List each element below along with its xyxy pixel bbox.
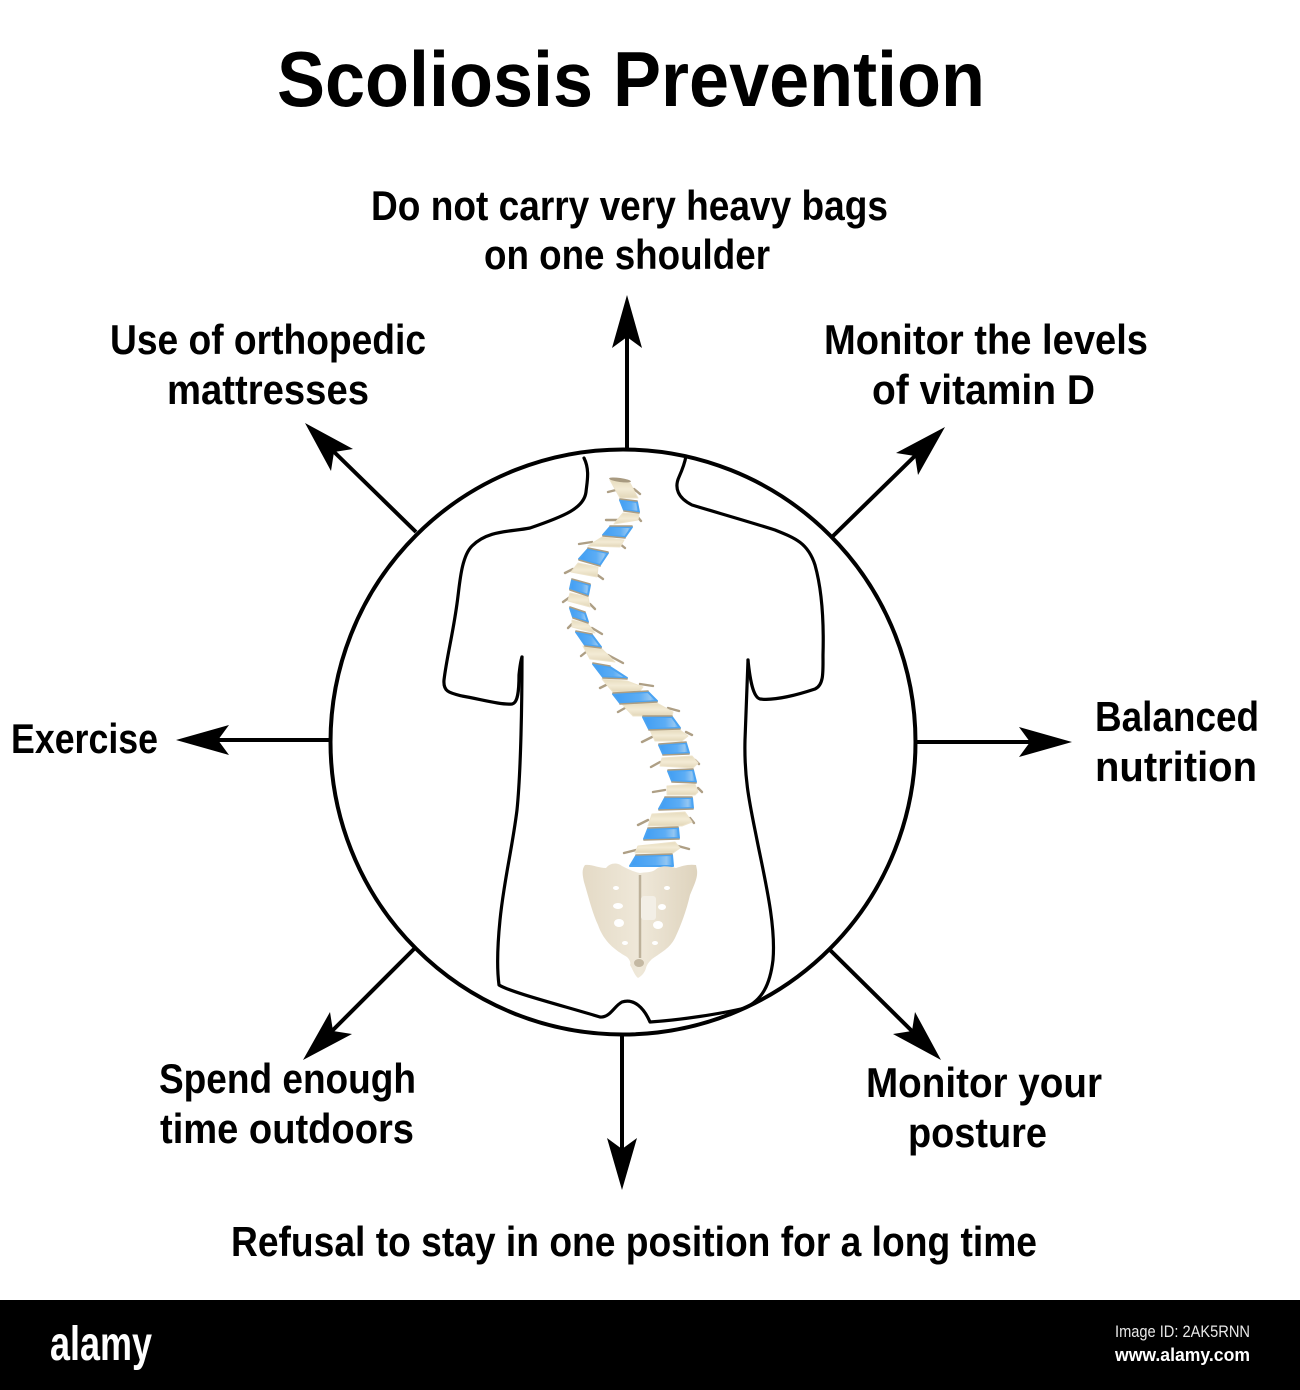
label: heavy bags — [371, 182, 888, 278]
arrow: right — [916, 727, 1072, 757]
arrow: down — [607, 1035, 637, 1190]
vertebrae — [568, 480, 698, 853]
label: vitamin D: Monitor the levels — [824, 316, 1148, 363]
label: time outdoors — [159, 1055, 416, 1152]
label: balanced nutrition — [1095, 693, 1259, 790]
vertebra end plates — [570, 499, 696, 855]
arrow: up left — [305, 423, 416, 532]
sacrum — [583, 864, 697, 978]
label: time outdoors: time outdoors — [160, 1105, 414, 1152]
central circle — [330, 450, 916, 1034]
label: balanced nutrition: nutrition — [1095, 743, 1257, 790]
label: time outdoors: Spend enough — [159, 1055, 416, 1102]
arrow: up — [612, 295, 642, 450]
label: long positions: Refusal to stay in one position for a long time — [231, 1218, 1037, 1265]
footer url: www.alamy.com — [1114, 1345, 1250, 1365]
torso outline — [444, 456, 823, 1022]
spinal processes — [563, 489, 702, 853]
label: posture: Monitor your — [866, 1059, 1102, 1106]
arrow: left — [176, 725, 330, 755]
footer image id: Image ID: 2AK5RNN — [1115, 1322, 1250, 1341]
title: Scoliosis Prevention — [277, 35, 985, 123]
arrow: down right — [830, 950, 941, 1060]
label: heavy bags: on one shoulder — [484, 231, 770, 278]
spine — [563, 476, 702, 866]
arrow: down left — [303, 949, 414, 1060]
label: orthopedic mattresses: mattresses — [167, 366, 369, 413]
label: exercise: Exercise — [11, 715, 158, 762]
label: vitamin D: of vitamin D — [872, 366, 1095, 413]
label: heavy bags: Do not carry very heavy bags — [371, 182, 888, 229]
label: vitamin D — [824, 316, 1148, 413]
label: balanced nutrition: Balanced — [1095, 693, 1259, 740]
arrow: up right — [832, 427, 945, 537]
label: orthopedic mattresses: Use of orthopedic — [110, 316, 426, 363]
intervertebral discs — [570, 500, 696, 866]
label: posture: posture — [908, 1109, 1047, 1156]
top vertebra cap — [609, 476, 631, 484]
footer bar — [0, 1300, 1300, 1390]
footer logo: alamy — [50, 1318, 152, 1371]
label: orthopedic mattresses — [110, 316, 426, 413]
label: posture — [866, 1059, 1102, 1156]
